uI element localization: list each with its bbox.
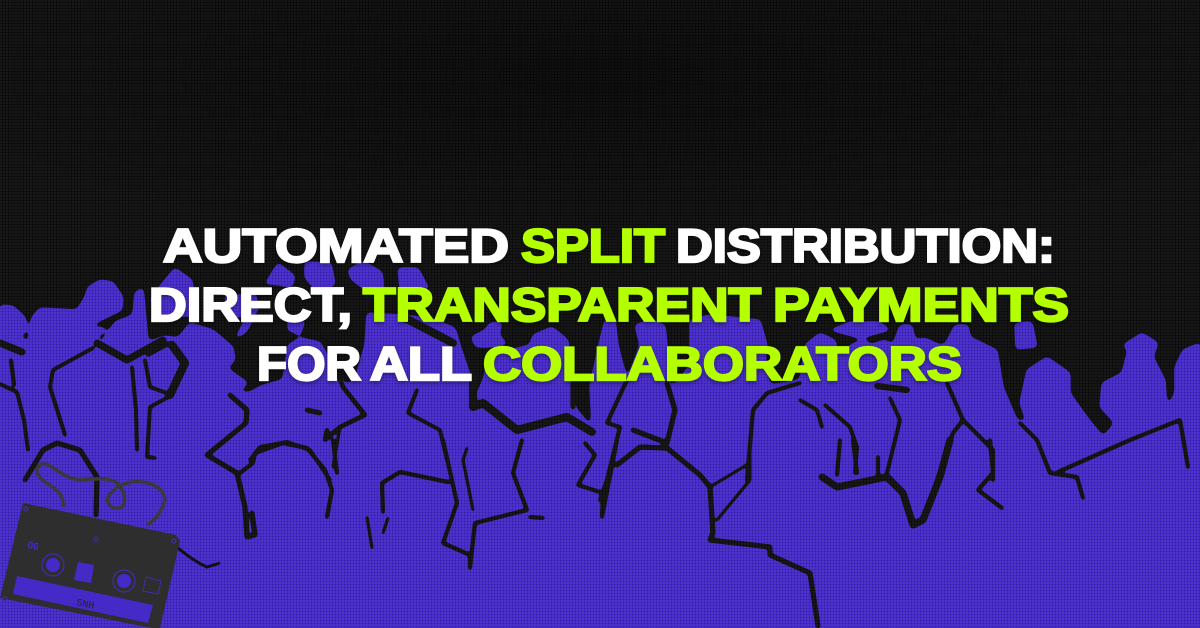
small tag (143, 577, 161, 594)
cassette body (0, 503, 180, 628)
loose tape (37, 464, 165, 525)
title line 3: ALL (370, 338, 472, 391)
crowd base fill (0, 560, 1200, 628)
crowd left edge fill (0, 310, 3, 342)
label strip (13, 576, 153, 623)
title line 2 (149, 279, 1069, 332)
crowd head blobs (150, 261, 1037, 349)
title line 3: FOR (257, 338, 361, 391)
side number: 06 (26, 540, 40, 553)
title line 1: SPLIT (521, 220, 665, 273)
icon: cassette tape (0, 464, 220, 628)
crowd main body (0, 280, 1200, 628)
label scribble: SNH (75, 598, 95, 613)
crowd lower left edge fill (0, 352, 3, 628)
title (149, 220, 1069, 391)
title line 1: DISTRIBUTION: (676, 220, 1055, 273)
title line 2: DIRECT, (149, 279, 352, 332)
crowd right edge fill (1197, 348, 1200, 628)
crowd silhouette (0, 261, 1200, 628)
title line 1: AUTOMATED (163, 220, 509, 273)
title line 3 (257, 338, 962, 391)
title line 2: TRANSPARENT (363, 279, 761, 332)
title line 3: COLLABORATORS (483, 338, 962, 391)
crowd outlines (0, 317, 1188, 626)
title line 2: PAYMENTS (773, 279, 1069, 332)
cassette tail line (178, 548, 220, 567)
top darkening (0, 0, 1200, 300)
title line 1 (163, 220, 1055, 273)
screws (3, 507, 176, 601)
window and reels (42, 554, 135, 592)
